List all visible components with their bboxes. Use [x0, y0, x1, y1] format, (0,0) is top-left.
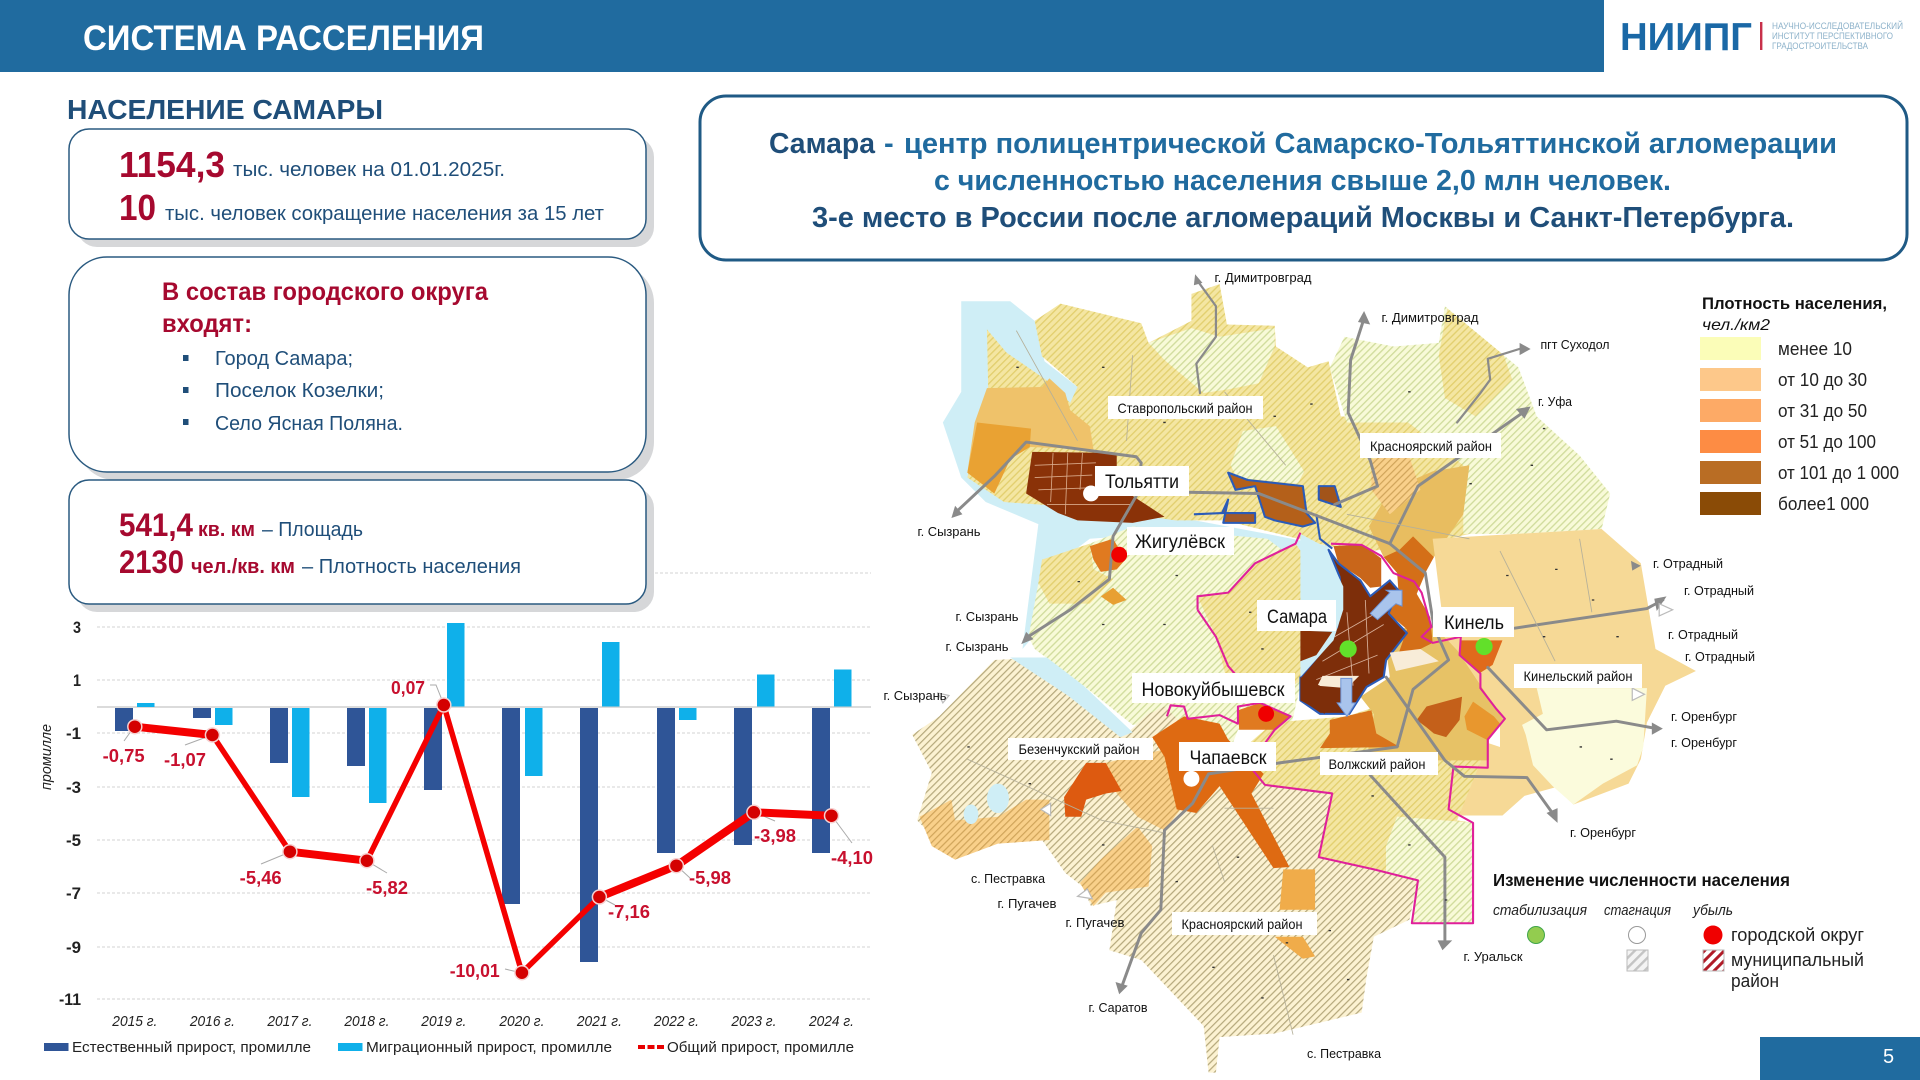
data labels [103, 678, 873, 981]
panel: population figures: 1154,3 [119, 144, 225, 185]
data labels: -0,75 [103, 746, 145, 766]
map: Samara oblast [884, 270, 1920, 1080]
district label boxes: Кинельский район [1524, 668, 1632, 684]
city label boxes: Кинель [1444, 613, 1504, 634]
y axis labels: -11 [59, 990, 81, 1009]
direction labels: г. Сызрань [884, 688, 947, 703]
panel: area and density: чел./кв. км [191, 556, 295, 578]
legend: population change: стагнация [1604, 903, 1671, 919]
legend: population density: от 31 до 50 [1778, 401, 1867, 421]
callout: agglomeration: - [884, 128, 894, 160]
panel: urban district composition: Поселок Козелки; [215, 380, 384, 402]
x axis labels: 2016 г. [189, 1013, 235, 1030]
legend: population density [1700, 294, 1899, 515]
y axis labels: -3 [66, 778, 81, 797]
direction labels: г. Отрадный [1685, 649, 1755, 664]
direction labels: г. Сызрань [956, 609, 1019, 624]
direction labels: с. Пестравка [971, 871, 1046, 886]
logo [1620, 16, 1903, 59]
logo: НИИПГ [1620, 16, 1752, 59]
panel: urban district composition: В состав городского округа [162, 278, 489, 306]
panel: urban district composition: Село Ясная Поляна. [215, 413, 403, 435]
arrow: flow to Samara diagonal [1370, 590, 1402, 620]
chart legend: Миграционный прирост, промилле [366, 1039, 612, 1056]
callout: agglomeration: центр полицентрической Самарско-Тольяттинской агломерации [904, 128, 1837, 160]
urban: Samara [1333, 545, 1381, 588]
zone: central hatched [1029, 527, 1322, 765]
panel: population figures: тыс. человек сокращение населения за 15 лет [165, 203, 604, 225]
y axis labels: -7 [66, 884, 81, 903]
x axis labels [111, 1013, 854, 1030]
city label boxes: Самара [1267, 607, 1327, 628]
direction labels: г. Уральск [1464, 949, 1523, 964]
city label boxes: Жигулёвск [1135, 532, 1226, 553]
marker: Novokuybyshevsk [1258, 706, 1274, 722]
data labels: -5,46 [240, 868, 282, 888]
zone: Volzhsky district [1231, 686, 1482, 873]
legend: population change [1493, 870, 1864, 991]
callout: agglomeration: 3-е место в России после агломераций Москвы и Санкт-Петербурга. [812, 202, 1794, 234]
x axis labels: 2017 г. [266, 1013, 312, 1030]
direction labels: с. Пестравка [1307, 1046, 1382, 1061]
zone: south hatched districts [912, 658, 1418, 1073]
panel: urban district composition [69, 257, 654, 480]
data labels: 0,07 [391, 678, 425, 698]
legend: population change: Изменение численности населения [1493, 870, 1790, 890]
callout: agglomeration: Самара [769, 128, 876, 160]
direction labels: г. Отрадный [1653, 556, 1723, 571]
urban: Kinel [1460, 640, 1502, 673]
panel: area and density: кв. км [198, 519, 255, 541]
x axis labels: 2023 г. [730, 1013, 776, 1030]
direction labels: г. Отрадный [1668, 627, 1738, 642]
page number [1760, 1037, 1920, 1080]
data labels: -5,98 [689, 868, 731, 888]
marker: Tolyatti [1083, 486, 1099, 501]
zone: Kinel district [1433, 529, 1696, 816]
settlement dots [967, 367, 1619, 998]
marker: Chapaevsk [1183, 771, 1199, 787]
urban: Bezenchuk [1064, 763, 1122, 817]
data labels: -7,16 [608, 902, 650, 922]
legend: population density: менее 10 [1778, 339, 1852, 359]
urban: Chapaevsk [1152, 716, 1289, 868]
direction labels: г. Сызрань [918, 524, 981, 539]
chart legend [44, 1039, 854, 1056]
direction labels: г. Димитровград [1382, 310, 1479, 325]
x axis labels: 2018 г. [343, 1013, 389, 1030]
urban: corridor with blue border [1228, 473, 1315, 527]
x axis labels: 2015 г. [111, 1013, 157, 1030]
chart legend: Общий прирост, промилле [667, 1039, 854, 1056]
y axis labels: 3 [73, 618, 81, 637]
panel: population figures [69, 129, 654, 247]
leader lines [124, 685, 852, 973]
panel: population figures: 10 [119, 187, 156, 228]
district label boxes: Волжский район [1328, 756, 1426, 772]
district label boxes [1008, 396, 1642, 935]
callout: agglomeration: с численностью населения свыше 2,0 млн человек. [934, 165, 1671, 197]
panel: urban district composition: входят: [162, 310, 252, 338]
data labels: -4,10 [831, 848, 873, 868]
patches: Volzhsky orange [1417, 697, 1462, 737]
legend: population density: более1 000 [1778, 494, 1869, 514]
panel: area and density: – Площадь [262, 519, 363, 541]
direction labels: г. Димитровград [1214, 270, 1312, 285]
y axis title: промилле [38, 724, 55, 790]
legend: population change: стабилизация [1493, 903, 1587, 919]
direction labels: г. Пугачев [998, 896, 1057, 911]
district label boxes: Красноярский район [1370, 438, 1492, 454]
legend: population density: от 101 до 1 000 [1778, 463, 1899, 483]
panel: population figures: тыс. человек на 01.01.2025г. [233, 159, 505, 181]
chart legend: Естественный прирост, промилле [72, 1039, 311, 1056]
direction labels: г. Оренбург [1570, 825, 1636, 840]
direction labels: г. Саратов [1088, 1000, 1148, 1015]
section heading: population: НАСЕЛЕНИЕ САМАРЫ [67, 94, 383, 125]
panel: area and density [69, 480, 654, 612]
road arrows [951, 274, 1667, 994]
direction labels: пгт Суходол [1540, 337, 1610, 352]
panel: urban district composition: Город Самара; [215, 348, 353, 370]
data labels: -1,07 [164, 750, 206, 770]
urban: Tolyatti [1026, 452, 1164, 523]
logo: ИНСТИТУТ ПЕРСПЕКТИВНОГО [1772, 31, 1893, 42]
x axis labels: 2022 г. [653, 1013, 699, 1030]
roads [956, 279, 1663, 987]
panel: area and density: 541,4 [119, 507, 193, 543]
callout: agglomeration [700, 96, 1907, 260]
bars: natural growth [115, 708, 830, 962]
direction labels: г. Пугачев [1066, 915, 1125, 930]
direction labels [884, 270, 1755, 1061]
zone: Stavropol district [967, 284, 1476, 551]
bar and line chart: population growth [38, 573, 873, 1056]
y axis labels: -5 [66, 831, 81, 850]
direction labels: г. Сызрань [946, 639, 1009, 654]
water: Volga [943, 301, 1343, 710]
marker: Kinel [1476, 638, 1493, 655]
city label boxes: Тольятти [1105, 472, 1179, 493]
header bar [0, 0, 1604, 72]
arrow: flow down [1337, 678, 1356, 716]
legend: population change: городской округ [1731, 925, 1864, 945]
legend: population density: Плотность населения, [1702, 294, 1887, 313]
x axis labels: 2020 г. [498, 1013, 544, 1030]
logo: НАУЧНО-ИССЛЕДОВАТЕЛЬСКИЙ [1772, 20, 1903, 32]
title: СИСТЕМА РАССЕЛЕНИЯ [83, 19, 484, 58]
city label boxes: Новокуйбышевск [1142, 680, 1285, 701]
thin roads [967, 331, 1592, 1035]
urban: Novokuybyshevsk [1238, 703, 1291, 730]
direction labels: г. Уфа [1538, 394, 1573, 409]
x axis labels: 2019 г. [420, 1013, 466, 1030]
y axis labels: -1 [66, 724, 81, 743]
line: total growth [135, 705, 832, 973]
city label boxes: Чапаевск [1190, 748, 1267, 769]
legend: population density: от 10 до 30 [1778, 370, 1867, 390]
page number: 5 [1883, 1046, 1894, 1068]
panel: area and density: 2130 [119, 544, 184, 580]
city label boxes [1095, 466, 1514, 771]
data labels: -3,98 [754, 826, 796, 846]
panel: area and density: – Плотность населения [302, 556, 521, 578]
direction labels: г. Отрадный [1684, 583, 1754, 598]
legend: population density: чел./км2 [1702, 317, 1770, 334]
x axis labels: 2021 г. [576, 1013, 622, 1030]
legend: population change: район [1731, 971, 1779, 991]
y axis labels [59, 618, 81, 1009]
patches: Stavropol orange [967, 378, 1093, 493]
x axis labels: 2024 г. [808, 1013, 854, 1030]
data labels: -5,82 [366, 878, 408, 898]
y axis labels: 1 [73, 671, 81, 690]
urban: Zhigulevsk [1090, 539, 1125, 572]
legend: population density: от 51 до 100 [1778, 432, 1876, 452]
zone: Krasnoyarsk district [1330, 306, 1610, 534]
district label boxes: Ставропольский район [1118, 400, 1252, 416]
direction labels: г. Оренбург [1671, 735, 1737, 750]
logo: ГРАДОСТРОИТЕЛЬСТВА [1772, 41, 1869, 52]
boundaries: pink [1167, 544, 1505, 923]
data labels: -10,01 [450, 961, 500, 981]
marker: Zhigulevsk [1111, 547, 1127, 563]
marker: Samara [1340, 640, 1357, 658]
y axis labels: -9 [66, 938, 81, 957]
district label boxes: Красноярский район [1182, 916, 1302, 932]
legend: population change: убыль [1692, 903, 1733, 919]
patches: south orange [920, 800, 1049, 860]
district label boxes: Безенчукский район [1018, 741, 1140, 757]
legend: population change: муниципальный [1731, 950, 1864, 970]
direction labels: г. Оренбург [1671, 709, 1737, 724]
bars: migration growth [137, 623, 852, 803]
